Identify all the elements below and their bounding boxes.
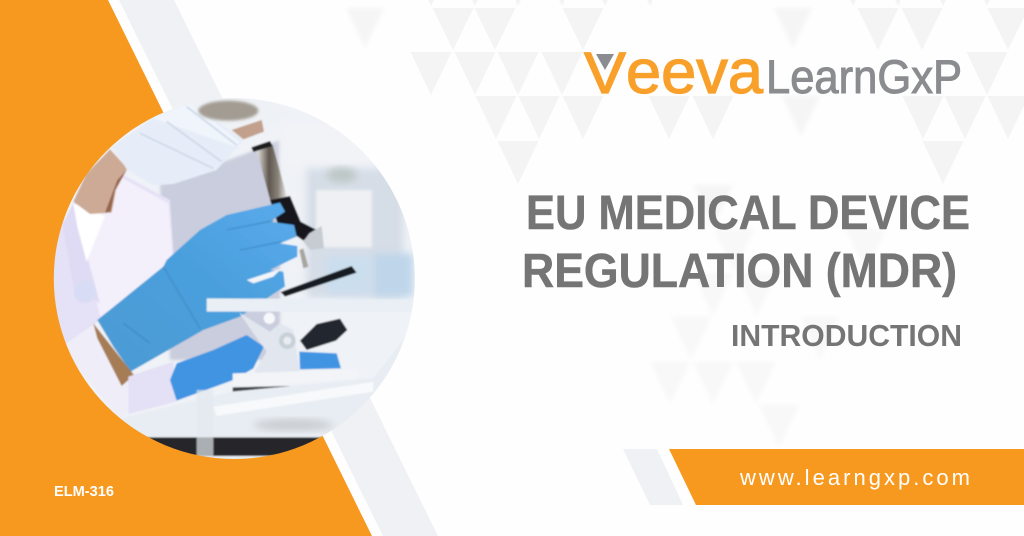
logo: Veeva LearnGxP — [584, 38, 962, 107]
title line 2: REGULATION (MDR) — [522, 245, 957, 298]
course code: ELM-316 — [54, 484, 114, 500]
photo: lower blue glove — [170, 335, 341, 401]
photo: lab coat — [47, 173, 174, 343]
photo: lower sleeve and wrist — [93, 324, 176, 414]
title — [522, 187, 970, 298]
logo wordmark: Veeva: eeva — [626, 38, 764, 107]
logo wordmark: LearnGxP: LearnGxP — [766, 50, 962, 103]
orange website banner — [669, 449, 1024, 505]
grey diagonal stripe — [119, 0, 438, 536]
grey footer stripe — [623, 449, 683, 505]
photo: blurred lab background — [62, 102, 415, 419]
photo: face mask and goggles — [114, 98, 264, 184]
photo: neck — [73, 149, 127, 214]
logo wordmark: Veeva: V — [584, 41, 626, 106]
photo: microscope stand — [231, 312, 348, 392]
website URL: www.learngxp.com — [739, 465, 970, 490]
photo: foreground shelf and table — [147, 297, 383, 458]
subtitle: INTRODUCTION — [731, 318, 962, 353]
title line 1: EU MEDICAL DEVICE — [526, 187, 970, 240]
photo: microscope head — [251, 141, 324, 268]
photo: microscope stage — [281, 266, 357, 297]
circular laboratory photo — [54, 98, 415, 459]
photo: main blue glove — [97, 203, 297, 372]
logo: grey triangle in V — [596, 54, 614, 70]
orange diagonal panel — [0, 0, 372, 536]
background triangle pattern — [346, 0, 1024, 447]
